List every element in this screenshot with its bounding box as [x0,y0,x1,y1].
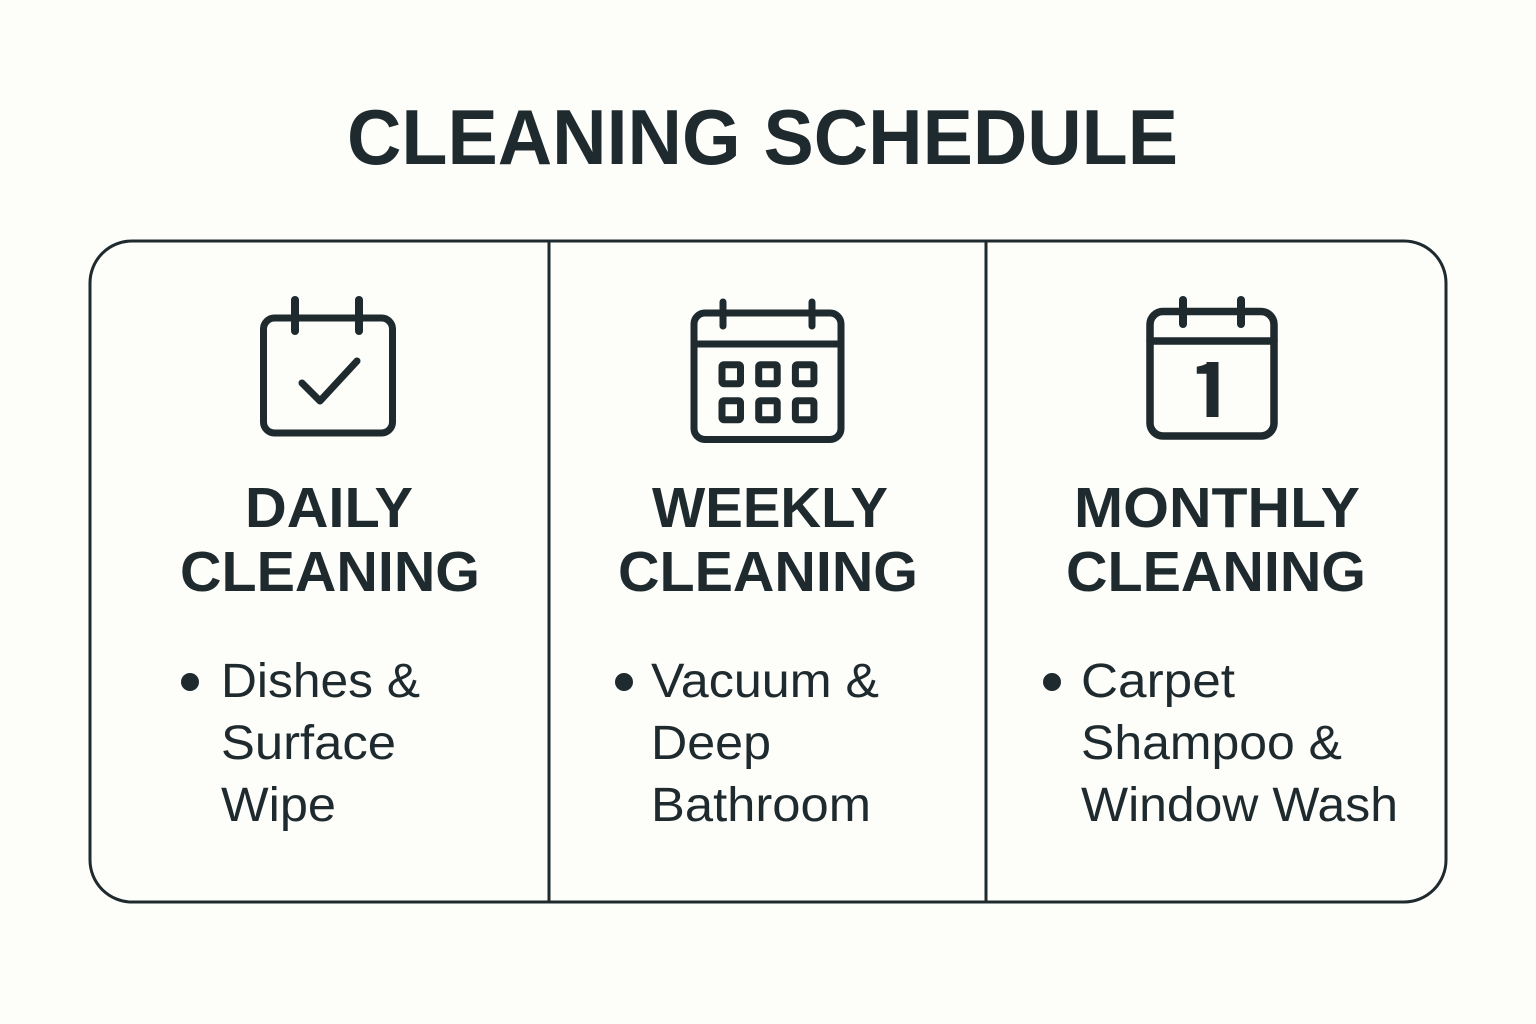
panel: schedule table [90,241,1446,902]
list: weekly tasks [615,655,879,832]
heading: daily cleaning: CLEANING [180,540,480,604]
icon: calendar with number 1: 1 [1189,329,1233,439]
icon: calendar with grid [694,302,841,440]
list: weekly tasks: Deep [651,717,771,770]
list: monthly tasks: Carpet [1081,655,1235,708]
list: daily tasks: Wipe [221,779,336,832]
list: daily tasks [181,655,420,832]
heading: monthly cleaning [1066,476,1366,604]
icon: calendar with number 1 [1150,300,1274,439]
heading: daily cleaning [180,476,480,604]
heading: monthly cleaning: MONTHLY [1074,476,1360,540]
list: daily tasks: Surface [221,717,396,770]
list: monthly tasks: Shampoo & [1081,717,1342,770]
list: daily tasks: Dishes & [221,655,420,708]
icon: calendar with check [264,300,392,433]
heading: weekly cleaning [618,476,918,604]
heading: daily cleaning: DAILY [245,476,413,540]
list: weekly tasks: Vacuum & [651,655,879,708]
list: monthly tasks: Window Wash [1081,779,1398,832]
list: weekly tasks: Bathroom [651,779,871,832]
heading: weekly cleaning: WEEKLY [652,476,888,540]
title: CLEANING SCHEDULE [347,93,1178,181]
heading: weekly cleaning: CLEANING [618,540,918,604]
heading: monthly cleaning: CLEANING [1066,540,1366,604]
list: monthly tasks [1043,655,1398,832]
